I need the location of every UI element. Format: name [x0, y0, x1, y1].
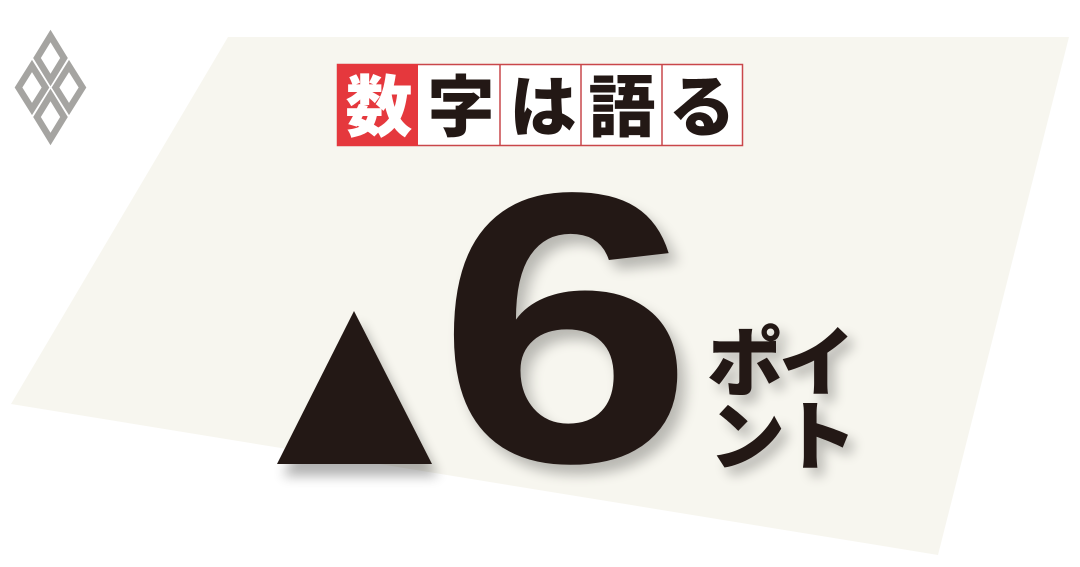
label: ポイント unit stacked in two rows with shadow: ン — [716, 404, 792, 489]
title: 数字は語る boxed heading: 数 — [346, 71, 412, 146]
title: 数字は語る boxed heading — [337, 64, 742, 146]
title: 数字は語る boxed heading: る — [668, 71, 736, 146]
label: ポイント unit stacked in two rows with shadow: ポ — [714, 330, 790, 415]
label: ポイント unit stacked in two rows with shadow: ト — [788, 404, 864, 489]
label: ポイント unit stacked in two rows with shadow: ン — [709, 396, 785, 481]
title: 数字は語る boxed heading: は — [510, 71, 576, 146]
figure: triangle minus sign with shadow — [277, 311, 438, 476]
label: ポイント unit stacked in two rows with shadow: ポ — [707, 322, 783, 407]
label: ポイント unit stacked in two rows with shadow: イ — [786, 330, 862, 415]
label: ポイント unit stacked in two rows with shadow — [707, 322, 864, 489]
figure: large number 6 with shadow: 6 — [445, 123, 702, 553]
label: ポイント unit stacked in two rows with shadow: ト — [781, 396, 857, 481]
figure: large number 6 with shadow: 6 — [437, 113, 694, 543]
label: ポイント unit stacked in two rows with shadow: イ — [779, 322, 855, 407]
title: 数字は語る boxed heading: 語 — [588, 71, 656, 146]
title: 数字は語る boxed heading: 字 — [428, 71, 494, 146]
icon: four grey diamonds logo — [18, 36, 82, 139]
